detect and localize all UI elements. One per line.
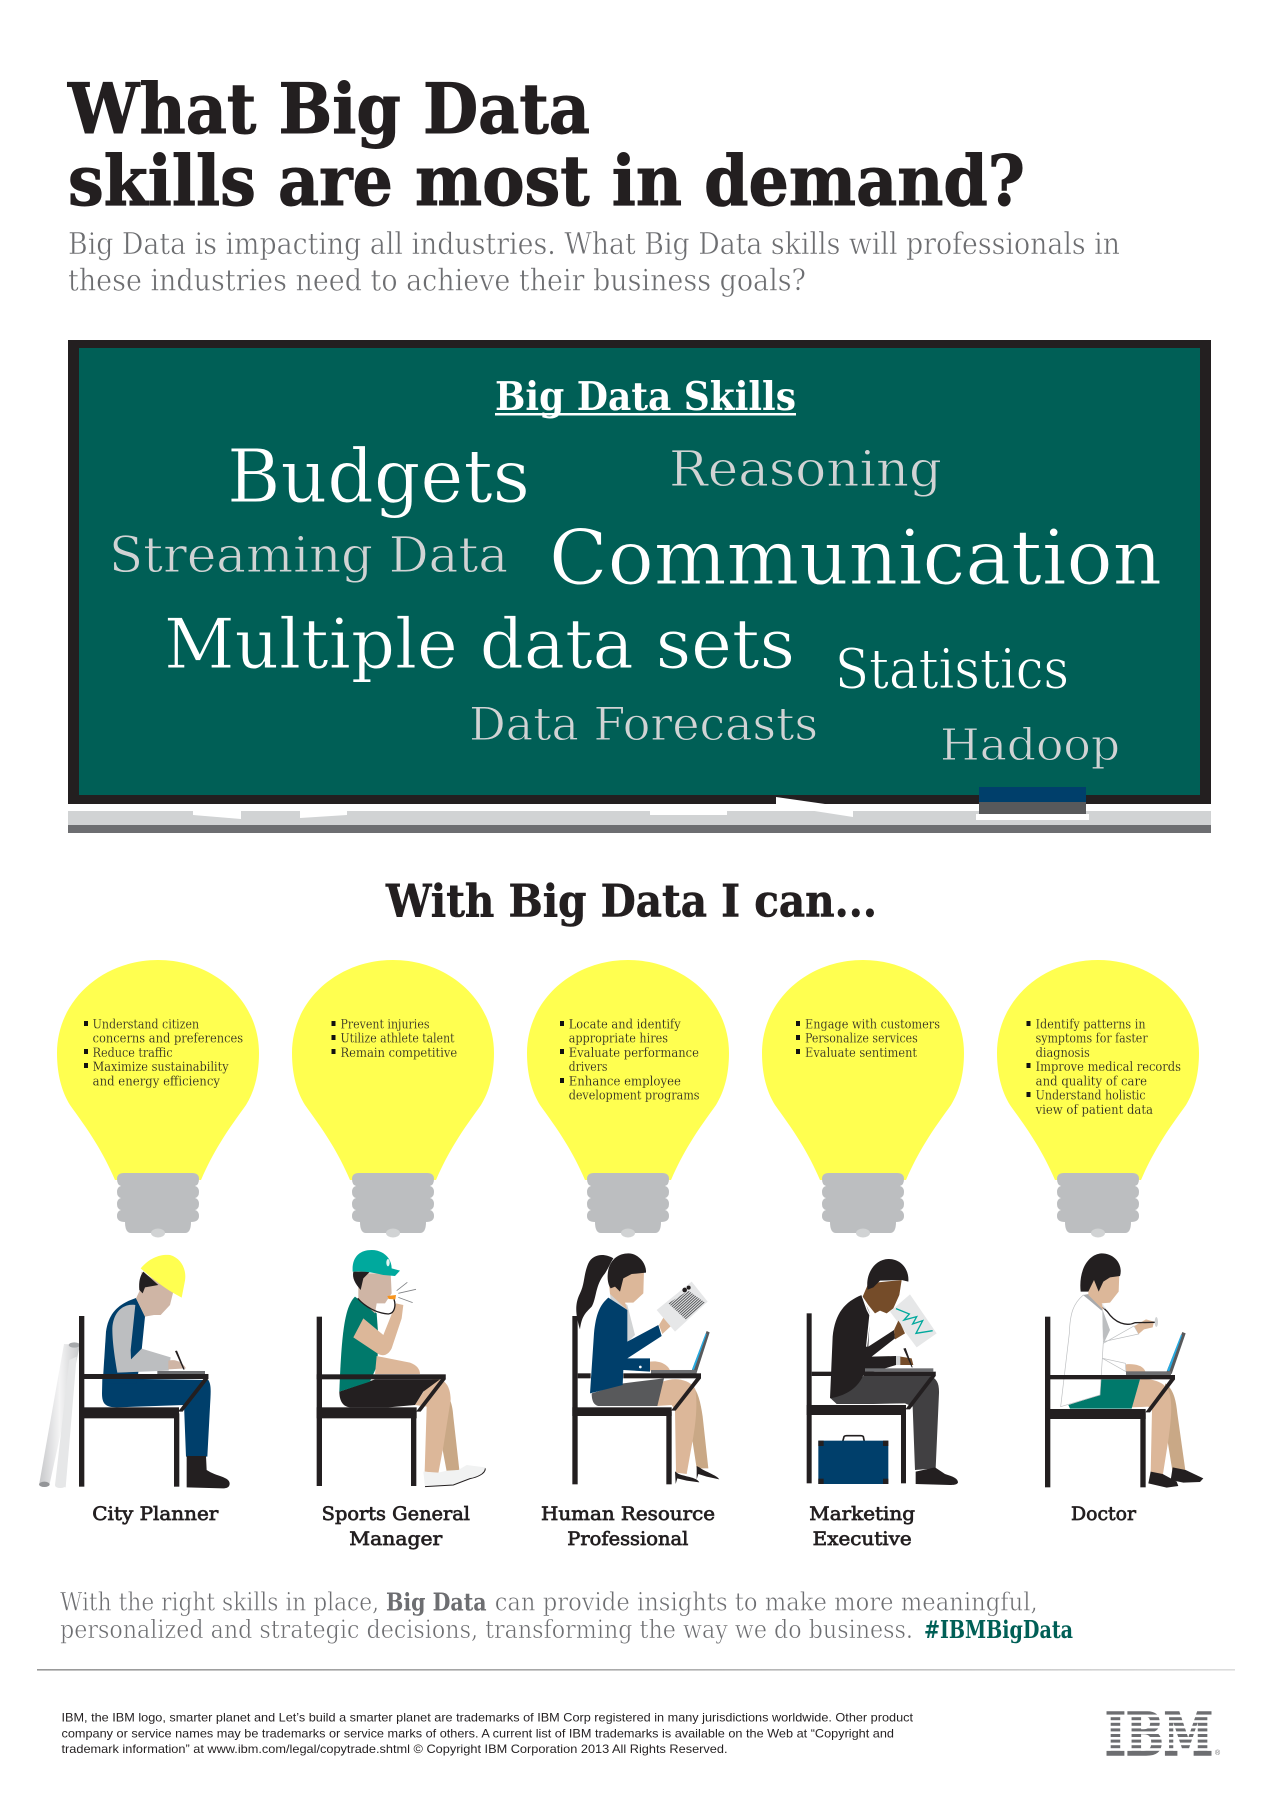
shirt xyxy=(339,1297,378,1392)
skill word cloud: Statistics xyxy=(835,637,1069,701)
skirt xyxy=(592,1378,664,1406)
figure: City Planner xyxy=(39,1255,230,1488)
skill word cloud: Streaming Data xyxy=(109,526,508,584)
shoe xyxy=(423,1465,485,1487)
hand and pen xyxy=(168,1360,186,1369)
bulb text: Sports General Manager xyxy=(332,1017,457,1061)
title: skills are most in demand? xyxy=(68,141,1025,222)
closing statement: #IBMBigData xyxy=(924,1615,1073,1644)
bulb text: Human Resource Professional: appropriate hires xyxy=(569,1032,668,1047)
hand xyxy=(1134,1319,1154,1334)
arm xyxy=(375,1356,420,1374)
legal text: trademark information” at www.ibm.com/legal/copytrade.shtml © Copyright IBM Corporation 2013 All Rights Reserved. xyxy=(62,1742,728,1756)
light bulb: Sports General Manager xyxy=(292,960,494,1238)
figure: Human Resource Professional xyxy=(572,1253,719,1484)
light bulb: Marketing Executive xyxy=(762,960,964,1238)
role labels: Sports General xyxy=(322,1503,470,1525)
rolled plans xyxy=(39,1342,80,1488)
subtitle xyxy=(68,227,1120,298)
figure: Doctor xyxy=(1045,1253,1203,1488)
chair xyxy=(807,1313,936,1483)
lab coat xyxy=(1061,1295,1139,1407)
head xyxy=(863,1280,902,1313)
bulb text: Sports General Manager: Utilize athlete talent xyxy=(340,1032,455,1047)
bulb text: City Planner: Understand citizen xyxy=(93,1017,200,1032)
role labels: Doctor xyxy=(1071,1503,1137,1525)
skill word cloud: Hadoop xyxy=(940,720,1120,771)
front leg xyxy=(1132,1379,1171,1476)
light bulb: City Planner xyxy=(57,960,259,1238)
bulb text: Sports General Manager: Remain competitive xyxy=(340,1046,457,1061)
shoes xyxy=(1148,1472,1178,1488)
skill word cloud: Communication xyxy=(549,513,1162,602)
closing statement: With the right skills in place, xyxy=(60,1588,379,1616)
head xyxy=(136,1272,173,1317)
heading: With Big Data I can: With Big Data I can... xyxy=(385,874,877,928)
bulb text: Doctor: and quality of care xyxy=(1036,1074,1147,1089)
back leg xyxy=(690,1383,708,1468)
chair xyxy=(79,1316,208,1487)
closing statement: Big Data xyxy=(386,1588,486,1616)
figure: Sports General Manager xyxy=(317,1250,485,1487)
subtitle: Big Data is impacting all industries. What Big Data skills will professionals in xyxy=(68,227,1120,262)
bulb text: Human Resource Professional: development programs xyxy=(569,1089,700,1104)
skill word cloud: Budgets xyxy=(227,434,530,520)
role labels xyxy=(92,1503,1137,1550)
role labels: City Planner xyxy=(92,1503,219,1525)
bulb text: Doctor: Improve medical records xyxy=(1036,1060,1181,1075)
bulb text: Human Resource Professional: Enhance employee xyxy=(569,1074,681,1089)
bulb text: Doctor: Identify patterns in xyxy=(1036,1017,1146,1032)
chair xyxy=(1045,1317,1175,1487)
back leg xyxy=(1165,1383,1186,1473)
head xyxy=(608,1270,644,1310)
chalk ledge xyxy=(68,797,1211,833)
laptop xyxy=(1126,1332,1186,1375)
bulb text: City Planner: Maximize sustainability xyxy=(93,1060,229,1075)
blazer xyxy=(590,1298,662,1393)
shorts xyxy=(339,1379,440,1407)
front leg xyxy=(657,1379,696,1474)
legal text: company or service names may be trademarks or service marks of others. A current list of IBM trademarks is available on the Web at “Copyright and xyxy=(62,1726,894,1740)
bulb text: Marketing Executive: Personalize services xyxy=(805,1032,918,1047)
chair xyxy=(572,1316,701,1484)
role labels: Human Resource xyxy=(541,1503,715,1525)
hand xyxy=(659,1315,671,1334)
hand on lap xyxy=(1126,1364,1145,1372)
panel: chalkboard xyxy=(68,340,1211,804)
role labels: Manager xyxy=(349,1528,443,1550)
IBM logo: ® xyxy=(1215,1749,1221,1757)
bulb text: City Planner xyxy=(84,1017,243,1089)
closing statement: personalized and strategic decisions, transforming the way we do business. xyxy=(60,1615,913,1644)
legal text xyxy=(62,1710,914,1756)
role labels: Professional xyxy=(567,1528,688,1550)
figure legs xyxy=(102,1378,211,1457)
bulb text: Sports General Manager: Prevent injuries xyxy=(340,1017,430,1032)
shoes xyxy=(675,1471,699,1484)
laptop / clipboard xyxy=(865,1368,933,1372)
title xyxy=(67,69,1025,222)
stethoscope xyxy=(1093,1282,1158,1327)
icon: eraser xyxy=(976,787,1089,820)
bulb text: Human Resource Professional: Locate and identify xyxy=(569,1017,681,1032)
skill word cloud: Data Forecasts xyxy=(469,697,818,751)
hand on lap xyxy=(650,1361,670,1371)
skirt xyxy=(1068,1379,1140,1409)
hand with pen xyxy=(897,1356,913,1365)
whistle xyxy=(358,1282,416,1314)
role labels: Marketing xyxy=(809,1503,915,1525)
bulb text: City Planner: and energy efficiency xyxy=(93,1074,221,1089)
shoe xyxy=(916,1467,958,1485)
bulb text: Doctor: diagnosis xyxy=(1036,1046,1090,1061)
title: What Big Data xyxy=(67,69,590,150)
document xyxy=(657,1282,708,1332)
heading: Big Data Skills: Big Data Skills xyxy=(495,374,796,420)
vest xyxy=(103,1298,145,1383)
skill word cloud: Multiple data sets xyxy=(164,605,795,685)
trousers xyxy=(831,1376,939,1470)
bulb text: Doctor: symptoms for faster xyxy=(1036,1032,1148,1047)
document xyxy=(890,1294,937,1347)
role labels: Executive xyxy=(813,1528,912,1550)
bulb text: Doctor: view of patient data xyxy=(1035,1103,1153,1118)
bulb text: Marketing Executive xyxy=(796,1017,940,1061)
closing statement: can provide insights to make more meaningful, xyxy=(495,1588,1038,1616)
skill word cloud xyxy=(109,434,1162,771)
legal text: IBM, the IBM logo, smarter planet and Let’s build a smarter planet are trademarks of IBM Corp registered in many jurisdictions worldwide. Other product xyxy=(62,1710,914,1724)
sleeve xyxy=(112,1305,171,1373)
IBM logo: IBM xyxy=(1105,1700,1213,1769)
skill word cloud: Reasoning xyxy=(669,440,942,498)
bulb text: Marketing Executive: Engage with customers xyxy=(805,1017,940,1032)
bulb text: Human Resource Professional: Evaluate performance xyxy=(569,1046,699,1061)
bulb text: Marketing Executive: Evaluate sentiment xyxy=(805,1046,918,1061)
blouse xyxy=(610,1293,635,1345)
head xyxy=(1088,1273,1119,1310)
bulb text: Doctor: Understand holistic xyxy=(1036,1089,1146,1104)
laptop xyxy=(651,1331,710,1374)
figure: Marketing Executive xyxy=(807,1259,958,1485)
bulb text: City Planner: Reduce traffic xyxy=(93,1046,173,1061)
bulb text: Human Resource Professional xyxy=(560,1017,700,1104)
light bulb: Doctor xyxy=(997,960,1199,1238)
bulb text: Human Resource Professional: drivers xyxy=(569,1060,607,1075)
bulb text: Doctor xyxy=(1026,1017,1181,1118)
briefcase xyxy=(818,1436,888,1484)
front leg xyxy=(415,1379,451,1473)
bulb text: City Planner: concerns and preferences xyxy=(93,1032,243,1047)
back leg xyxy=(443,1390,459,1471)
subtitle: these industries need to achieve their business goals? xyxy=(68,264,806,298)
jacket xyxy=(830,1295,896,1398)
chair xyxy=(317,1317,446,1486)
light bulb: Human Resource Professional xyxy=(527,960,729,1238)
hand xyxy=(894,1321,905,1339)
head xyxy=(358,1273,392,1313)
closing statement xyxy=(60,1588,1073,1644)
